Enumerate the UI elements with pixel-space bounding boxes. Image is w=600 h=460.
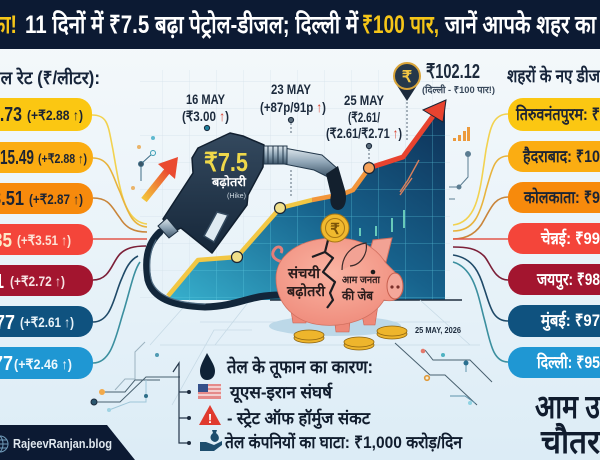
bottom right slogan [535,388,600,460]
ribbed collar [264,146,287,164]
nozzle collar [158,218,178,238]
handle opening [204,212,228,242]
pill: blue [0,347,93,379]
date label: 23 May: (+87p/91p ↑) [260,99,326,115]
pill: orange: (+₹2.87 ↑) [29,191,83,207]
floor grid [150,300,480,405]
pill: Delhi [508,347,600,378]
icon: warning triangle: ! [208,411,212,426]
date label: 16 May [182,91,229,131]
pill: yellow [0,98,92,131]
pill: orange [0,183,93,214]
chart node [232,252,242,262]
date label: 16 May: (₹3.00 ↑) [182,108,229,124]
title: white first part: 11 दिनों में ₹7.5 बढ़ा पेट्रोल-डीजल; दिल्ली में [25,10,359,39]
baseline [270,299,462,301]
pill: maroon: (+₹2.72 ↑) [10,273,65,289]
pig legs [290,305,378,332]
pig snout [387,273,403,299]
footer brand badge [0,425,135,460]
pill: Chennai [508,223,600,254]
peak price label [422,61,495,96]
header banner [0,0,600,49]
pill: blue: (+₹2.46 ↑) [14,356,72,372]
pig shadow [269,316,401,336]
pill: maroon [0,265,93,296]
date stamp: 25 MAY, 2026 [415,325,461,335]
pill: red [0,224,93,255]
icon: oil drop [200,353,215,380]
pig body [276,238,403,325]
hike amount: ₹7.5 [204,147,248,177]
date label: 25 May: 25 MAY [344,92,385,108]
date label: 25 May: (₹2.61/ [348,109,380,125]
oil storm causes block [173,353,463,452]
chart area [168,104,445,300]
chart node [274,202,286,214]
left connector lines [92,115,147,363]
pill: amber: 15.49 [0,147,34,169]
date label: 16 May: 16 MAY [186,91,226,107]
pill: Jaipur [508,264,600,295]
yellow trend line [168,200,312,296]
piggy label: pocket: की जेब [341,288,374,303]
date label: 23 May: 23 MAY [271,81,312,97]
brand name: RajeevRanjan.blog [13,436,112,451]
icon: globe [0,436,8,452]
rising price chart [168,100,446,300]
pig eye [371,270,375,274]
title: yellow highlight: ₹100 पार, [362,11,439,39]
orange trend line [312,168,369,200]
piggy label: common people: आम जनता [342,275,380,286]
icon: coins [294,326,407,350]
pill: navy [0,306,93,337]
pill: navy: (+₹2.61 ↑) [20,314,74,330]
icon: hand with money bag [200,430,222,451]
hose [147,232,280,307]
cause: Strait of Hormuz: - स्ट्रेट ऑफ हॉर्मुज संकट [227,408,371,429]
icon: small bars [453,127,470,141]
hike label: बढ़ोतरी [211,175,247,189]
left price pills [0,98,93,379]
icon: rupee location pin [394,63,420,141]
pig ear [370,238,392,262]
pill: amber [0,142,93,173]
pill: yellow: (+₹2.88 ↑) [27,107,83,123]
date label: 25 May [326,92,402,163]
icon: rupee location pin: ₹ [402,69,412,86]
right city pills [508,98,600,378]
piggy label: savings: संचयी [287,265,321,281]
circuit decoration bottom right [395,343,492,405]
causes heading: तेल के तूफान का कारण: [226,356,373,379]
cause: oil company loss: तेल कंपनियों का घाटा: ₹1,000 करोड़/दिन [224,432,463,452]
crack [312,240,335,308]
circuit decoration mid right [449,152,470,199]
fuel drip [326,166,346,210]
piggy label: hike: बढ़ोतरी [286,283,326,299]
pill: Thiruvananthapuram [508,98,600,131]
hike english label: (Hike) [227,193,246,200]
circuit decoration top left [131,136,156,190]
small rising arrow [144,157,178,200]
spout pipe [284,148,338,177]
peak price label: ₹102.12 [426,61,480,83]
red trend arrow [369,100,446,168]
date label: 23 May [260,81,326,198]
peak price label: (दिल्ली - ₹100 पार!) [422,84,495,96]
pig inner ear [342,243,366,270]
nozzle body and handle [163,133,264,253]
icon: US flag [198,384,221,399]
cause: US Iran conflict: यूएस-इरान संघर्ष [229,382,333,404]
icon: cracked piggy bank [269,214,403,336]
right connector lines [453,114,508,362]
pig tail [273,247,286,262]
chart node [364,162,374,174]
date label: 25 May: (₹2.61/₹2.71 ↑) [326,125,402,141]
pill: Hyderabad [508,141,600,172]
pill: Mumbai [508,305,600,337]
bracket lines [173,363,188,443]
pill: amber: (+₹2.88 ↑) [38,151,87,166]
circuit decoration bottom left [91,342,180,412]
icon: fuel nozzle [158,133,346,253]
pill: Kolkata [508,182,600,213]
pill: red: (+₹3.51 ↑) [17,232,71,248]
icon: warning triangle [199,405,221,426]
coin in slot: ₹ [330,221,340,238]
